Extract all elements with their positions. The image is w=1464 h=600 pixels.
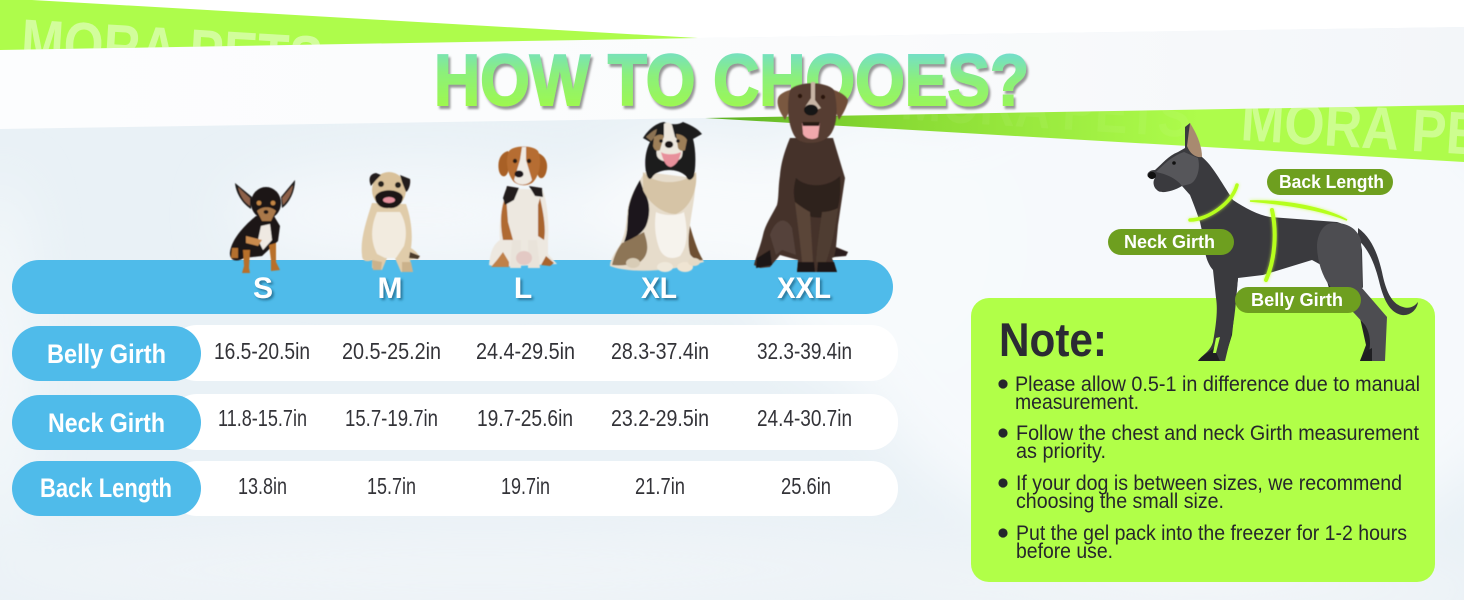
row: back length: 15.7in: [367, 473, 416, 499]
belly line: [1266, 210, 1275, 280]
ribbon watermark: right: [904, 107, 1464, 154]
dog: beagle L: [489, 146, 557, 268]
row: back length: 25.6in: [781, 473, 831, 499]
dog: pug M: [362, 172, 420, 272]
far legs: [1210, 278, 1238, 361]
collar line: [1190, 185, 1237, 220]
ear: [1187, 123, 1202, 157]
row: belly girth: 20.5-25.2in: [342, 338, 441, 364]
row: neck girth: 15.7-19.7in: [345, 405, 438, 431]
ribbon watermark: right: MORA PETS: [899, 65, 1193, 150]
illustration: great dane with measurement lines: [1147, 123, 1418, 361]
dog: labrador XXL: [754, 82, 848, 272]
size labels: [253, 272, 831, 305]
front foot: [1198, 348, 1220, 361]
row: neck girth: 23.2-29.5in: [611, 405, 709, 431]
row: neck girth: [12, 394, 898, 450]
note list: [998, 373, 1420, 563]
row: belly girth: Belly Girth: [47, 339, 166, 369]
row: belly girth: 32.3-39.4in: [757, 338, 852, 364]
note list: If your dog is between sizes, we recommend: [1016, 472, 1402, 495]
note list: Put the gel pack into the freezer for 1-2 hours: [1016, 522, 1407, 545]
row: neck girth: Neck Girth: [48, 408, 165, 438]
size header bar: [12, 260, 893, 314]
row: back length: 21.7in: [635, 473, 685, 499]
panel: note: [971, 298, 1435, 582]
row: back length: 19.7in: [501, 473, 550, 499]
pill: back length: [1267, 169, 1393, 195]
note list: Please allow 0.5-1 in difference due to manual: [1015, 373, 1420, 396]
note list: before use.: [1016, 540, 1113, 563]
note list: choosing the small size.: [1016, 490, 1224, 513]
right green ribbon: [706, 105, 1464, 162]
size labels: M: [378, 272, 402, 305]
pill: back length: Back Length: [1279, 172, 1384, 192]
row: back length: [12, 461, 898, 516]
nose and eye: [1148, 161, 1176, 179]
row: belly girth: 16.5-20.5in: [214, 338, 310, 364]
top white band: [0, 27, 1464, 129]
body and neck: [1147, 123, 1363, 361]
head highlight: [1156, 152, 1199, 186]
note list: Follow the chest and neck Girth measurement: [1016, 422, 1419, 445]
note heading: Note:: [999, 313, 1107, 366]
row: neck girth: 11.8-15.7in: [218, 405, 307, 431]
size labels: L: [514, 272, 532, 305]
ribbon watermark: left: MORA PETS: [19, 7, 325, 94]
row: belly girth: [12, 325, 898, 381]
top left green ribbon: [0, 0, 698, 50]
note list: measurement.: [1015, 391, 1139, 414]
pill: belly girth: [1235, 287, 1361, 313]
tail: [1358, 228, 1418, 315]
back foot: [1360, 348, 1372, 361]
leg gap: [1213, 337, 1220, 353]
haunch and hind leg: [1317, 223, 1387, 361]
title: HOW TO CHOOES?: [434, 41, 1029, 121]
pill: neck girth: [1108, 229, 1234, 255]
dog: chihuahua S: [230, 180, 295, 273]
pill: neck girth: Neck Girth: [1124, 232, 1215, 252]
row: neck girth: 24.4-30.7in: [757, 405, 852, 431]
note list: as priority.: [1016, 440, 1106, 463]
row: belly girth: 28.3-37.4in: [611, 338, 709, 364]
row: neck girth: 19.7-25.6in: [477, 405, 573, 431]
size labels: XXL: [777, 272, 831, 305]
size labels: XL: [641, 272, 677, 305]
pill: belly girth: Belly Girth: [1251, 290, 1343, 310]
dog: collie XL: [610, 122, 704, 272]
top white area: [0, 0, 1464, 50]
row: belly girth: 24.4-29.5in: [476, 338, 575, 364]
row: back length: 13.8in: [238, 473, 287, 499]
size labels: S: [253, 272, 273, 305]
size table rows: [12, 325, 898, 516]
row: back length: Back Length: [40, 473, 172, 503]
back length line: [1250, 201, 1347, 220]
